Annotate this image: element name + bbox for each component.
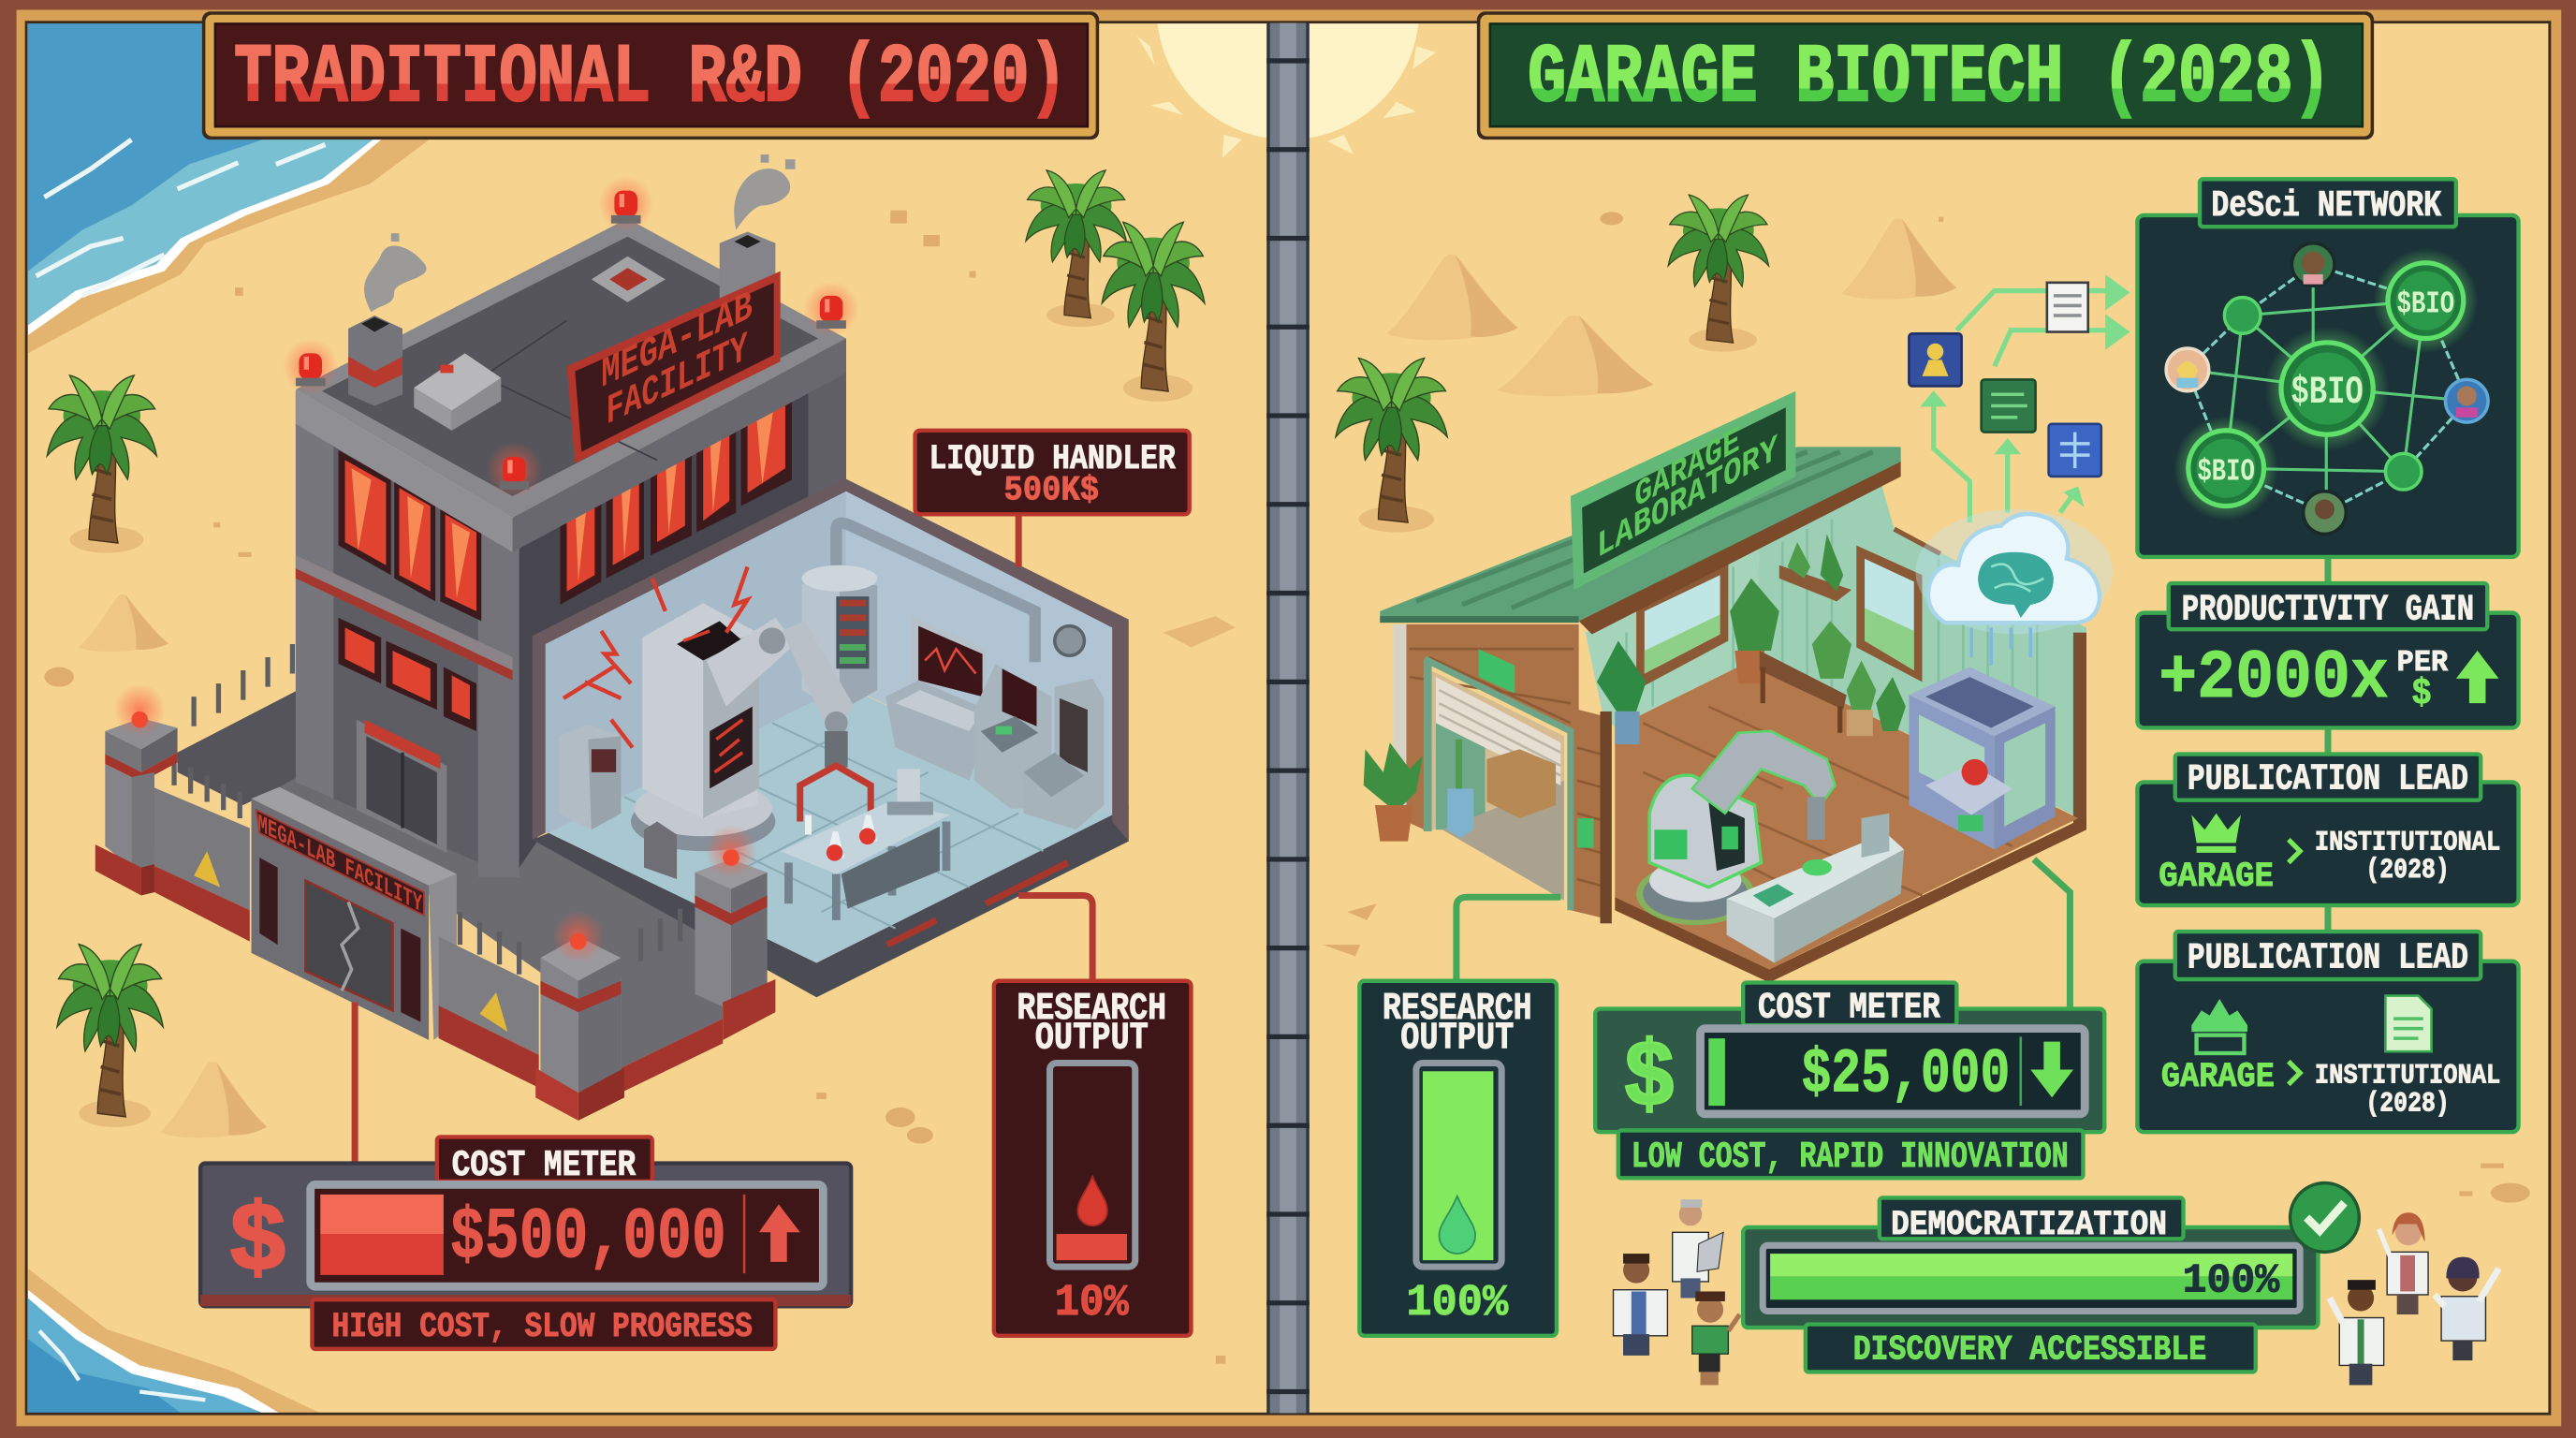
panel: desci network <box>2137 179 2519 557</box>
alarm lights <box>283 176 859 498</box>
caption: low cost: LOW COST, RAPID INNOVATION <box>1632 1137 2069 1178</box>
wood front wall with door opening <box>1393 624 1612 923</box>
indoor plants and table <box>1597 579 1906 744</box>
panel: democratization <box>1743 1197 2318 1328</box>
node: bottom left coin: $BIO <box>2197 454 2255 490</box>
panel: research output right <box>1359 981 1557 1336</box>
roof vent <box>592 257 666 302</box>
broken robot arm machine <box>564 566 871 851</box>
lab annex <box>533 478 1129 997</box>
sun <box>1137 0 1436 157</box>
data flow arrows <box>1925 279 2126 522</box>
panel: cost meter left: $500,000 <box>450 1198 726 1280</box>
mega-lab facility illustration <box>95 154 1129 1121</box>
icon: document <box>2047 283 2088 332</box>
tower windows <box>339 374 792 731</box>
caption: low cost <box>1618 1130 2083 1178</box>
node: central coin <box>2281 343 2373 434</box>
callout: liquid handler: LIQUID HANDLER <box>929 440 1177 479</box>
garage sign: GARAGE <box>1634 419 1740 519</box>
windows and shelf <box>1636 534 1922 690</box>
sand specks and rocks <box>44 211 2530 1364</box>
icon: green data tile <box>1982 379 2036 433</box>
panel: productivity gain: $ <box>2411 673 2432 714</box>
lab table with flasks <box>781 769 949 920</box>
node: top right coin <box>2388 263 2464 339</box>
panel: publication lead two: PUBLICATION LEAD <box>2188 938 2468 979</box>
caption: discovery accessible: DISCOVERY ACCESSIBLE <box>1853 1330 2206 1370</box>
panel: cost meter left: $ <box>228 1189 287 1298</box>
panel: democratization: 100% <box>2183 1257 2280 1304</box>
panel: productivity gain: PRODUCTIVITY GAIN <box>2182 590 2474 631</box>
node: central coin: $BIO <box>2291 370 2364 415</box>
connector lines left <box>355 516 1092 1162</box>
panel: publication lead two: INSTITUTIONAL <box>2315 1060 2500 1092</box>
panel: cost meter left: COST METER <box>452 1145 637 1186</box>
panel: productivity gain <box>2137 583 2519 727</box>
panel: publication lead one: PUBLICATION LEAD <box>2188 758 2468 800</box>
consoles <box>886 616 1104 829</box>
panel: cost meter right: $ <box>1623 1027 1676 1132</box>
workbench <box>1727 814 1904 962</box>
panel: research output right: RESEARCH <box>1383 988 1532 1031</box>
roof sign: MEGA-LAB <box>601 283 753 400</box>
caption: high cost: HIGH COST, SLOW PROGRESS <box>332 1308 753 1347</box>
central divider <box>1266 23 1310 1413</box>
back compound wall <box>178 683 311 805</box>
panel: cost meter left <box>200 1137 851 1306</box>
panel: research output right: 100% <box>1406 1279 1509 1328</box>
ocean top left <box>28 23 493 353</box>
node: bottom left coin <box>2188 431 2264 506</box>
panel: publication lead one: INSTITUTIONAL <box>2315 826 2500 858</box>
panel: publication lead one: GARAGE <box>2159 858 2274 897</box>
icon: paper <box>2385 996 2432 1051</box>
tank tower <box>801 565 877 712</box>
garage sign <box>1571 391 1795 590</box>
panel: publication lead two: GARAGE <box>2161 1058 2275 1097</box>
scientists right group <box>2330 1212 2499 1385</box>
icon: check badge <box>2291 1183 2359 1252</box>
air conditioner <box>414 353 501 431</box>
callout: liquid handler: 500K$ <box>1003 472 1099 511</box>
garage door interior <box>1425 649 1593 910</box>
chimneys with smoke <box>348 154 795 405</box>
panel: desci network: DeSci NETWORK <box>2211 185 2442 227</box>
tower faces <box>296 339 846 877</box>
callout: liquid handler <box>915 431 1190 514</box>
panel: research output left: OUTPUT <box>1035 1018 1149 1061</box>
plant pot outside <box>1364 742 1423 842</box>
wooden floor <box>1615 659 2086 983</box>
connector lines right <box>1456 559 2328 1007</box>
title: traditional: TRADITIONAL R&D (2020) <box>234 33 1067 125</box>
tower door <box>357 720 446 853</box>
panel: publication lead one <box>2137 755 2519 905</box>
panel: productivity gain: +2000x <box>2159 640 2389 718</box>
panel: productivity gain: PER <box>2397 647 2448 680</box>
panel: publication lead two <box>2137 932 2519 1132</box>
icon: blue dna tile <box>2049 424 2101 477</box>
compound left pillar and walls <box>95 644 292 942</box>
roof sign: FACILITY <box>607 324 748 436</box>
palm trees and dunes <box>47 170 1956 1137</box>
roof sign <box>567 271 781 463</box>
icon: user tile <box>1909 333 1962 386</box>
ocean bottom left <box>28 1269 320 1413</box>
title: garage biotech <box>1477 11 2374 139</box>
cloud with brain <box>1915 509 2113 666</box>
panel: cost meter right: $25,000 <box>1801 1039 2010 1110</box>
roof <box>1380 447 1901 634</box>
panel: research output left: RESEARCH <box>1017 988 1166 1031</box>
garage sign: LABORATORY <box>1597 428 1778 569</box>
icon: garage <box>2191 999 2247 1053</box>
title: garage biotech: GARAGE BIOTECH (2028) <box>1528 33 2331 125</box>
title: traditional <box>202 11 1099 139</box>
compound gate <box>252 787 457 1040</box>
garage laboratory illustration <box>1364 391 2086 983</box>
panel: research output right: OUTPUT <box>1400 1018 1514 1061</box>
panel: cost meter right <box>1595 983 2104 1132</box>
scientists left group <box>1614 1199 1740 1385</box>
caption: high cost <box>312 1299 775 1349</box>
panel: publication lead two: (2028) <box>2365 1087 2450 1119</box>
compound front walls <box>439 822 775 1121</box>
pipes <box>836 523 1035 662</box>
compound yard floor <box>279 772 731 999</box>
panel: research output left <box>994 981 1191 1336</box>
back walls <box>1586 483 2086 829</box>
node: top right coin: $BIO <box>2397 286 2454 322</box>
panel: cost meter right: COST METER <box>1758 987 1940 1028</box>
panel: publication lead one: (2028) <box>2365 854 2450 886</box>
robot arm <box>1636 731 1835 925</box>
3d printer <box>1909 668 2056 849</box>
icon: crown <box>2191 814 2241 853</box>
panel: research output left: 10% <box>1055 1279 1129 1328</box>
panel: democratization: DEMOCRATIZATION <box>1891 1206 2167 1245</box>
avatars <box>2166 243 2488 534</box>
roof <box>296 218 846 552</box>
control box <box>559 725 621 829</box>
compound gate: MEGA-LAB FACILITY <box>258 811 422 919</box>
